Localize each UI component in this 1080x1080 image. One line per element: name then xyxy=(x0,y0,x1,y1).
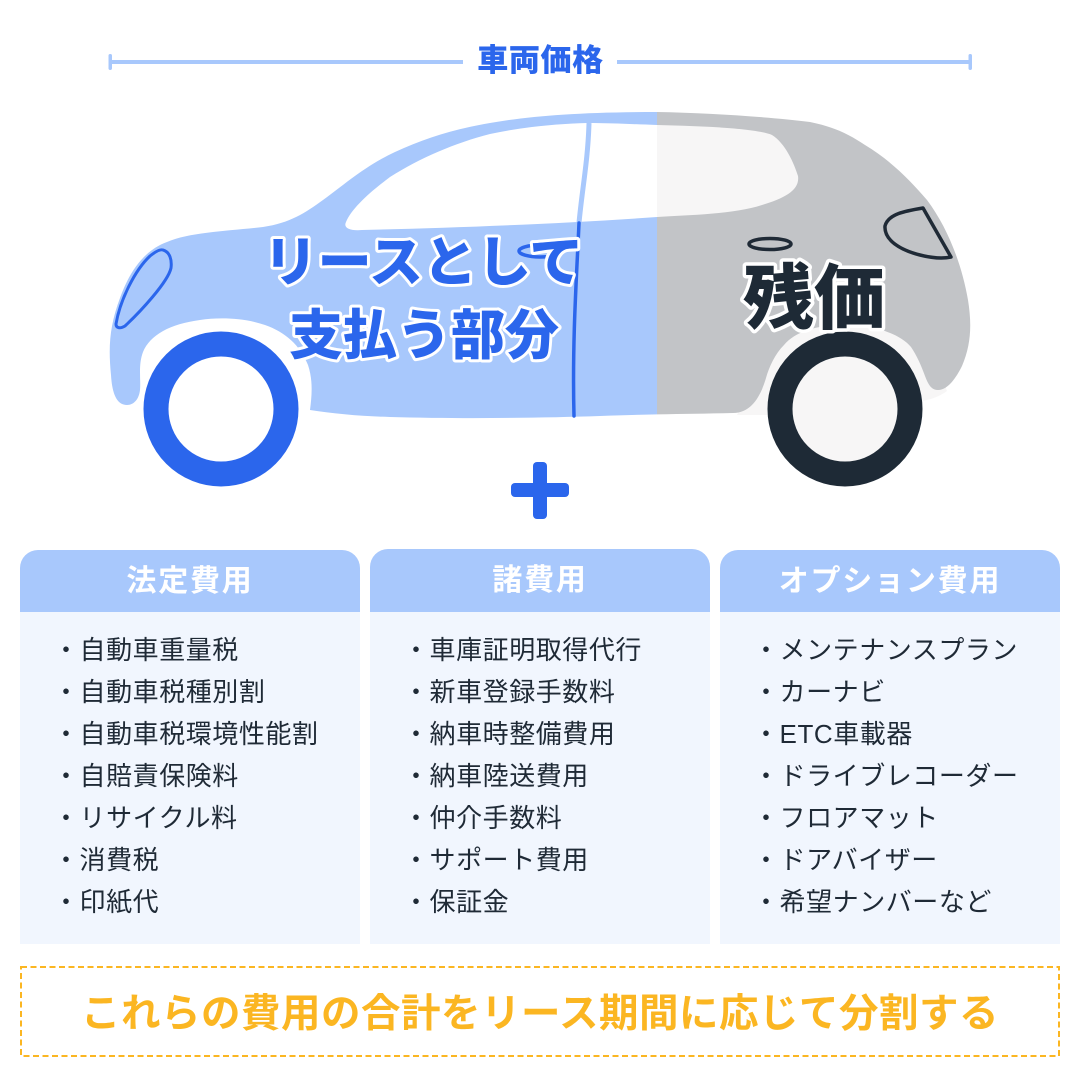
list: miscellaneous costs: ・納車時整備費用 xyxy=(403,719,615,749)
list: miscellaneous costs: ・仲介手数料 xyxy=(403,803,562,833)
callout: split total over lease period xyxy=(21,967,1059,1056)
list: statutory costs: ・自動車税環境性能割 xyxy=(53,719,319,749)
list: miscellaneous costs: ・納車陸送費用 xyxy=(403,761,589,791)
panel: statutory costs xyxy=(20,550,360,944)
car illustration xyxy=(110,112,970,474)
door line xyxy=(574,223,579,416)
list: option costs: ・希望ナンバーなど xyxy=(753,887,992,917)
callout: split total over lease period: これらの費用の合計をリース期間に応じて分割する xyxy=(81,992,999,1036)
icon: plus xyxy=(511,462,569,519)
label: lease portion xyxy=(264,233,583,366)
list: statutory costs: ・印紙代 xyxy=(53,887,159,917)
front wheel xyxy=(156,344,286,474)
header: vehicle price span: 車両価格 xyxy=(477,43,604,78)
window xyxy=(345,123,798,230)
list: miscellaneous costs: ・新車登録手数料 xyxy=(403,677,615,707)
label: lease portion: リースとして xyxy=(264,233,583,293)
front door handle xyxy=(519,245,561,257)
list: statutory costs xyxy=(53,635,319,917)
tail light xyxy=(885,208,951,258)
list: miscellaneous costs: ・サポート費用 xyxy=(403,845,589,875)
panel: miscellaneous costs xyxy=(370,549,710,944)
heading: statutory costs: 法定費用 xyxy=(126,565,254,598)
heading: miscellaneous costs: 諸費用 xyxy=(492,564,588,597)
list: statutory costs: ・自動車税種別割 xyxy=(53,677,265,707)
list: option costs xyxy=(753,635,1019,917)
list: statutory costs: ・自賠責保険料 xyxy=(53,761,239,791)
label: lease portion: 支払う部分 xyxy=(289,306,559,366)
heading: option costs: オプション費用 xyxy=(779,565,1001,598)
list: statutory costs: ・自動車重量税 xyxy=(53,635,239,665)
list: option costs: ・フロアマット xyxy=(753,803,939,833)
rear wheel xyxy=(780,344,910,474)
list: statutory costs: ・消費税 xyxy=(53,845,159,875)
list: option costs: ・メンテナンスプラン xyxy=(753,635,1018,665)
list: statutory costs: ・リサイクル料 xyxy=(53,803,238,833)
label: residual value: 残価 xyxy=(743,260,885,339)
list: option costs: ・カーナビ xyxy=(753,677,886,707)
panel: option costs xyxy=(720,550,1060,944)
headlight xyxy=(116,250,171,328)
list: miscellaneous costs: ・車庫証明取得代行 xyxy=(403,635,642,665)
list: miscellaneous costs xyxy=(403,635,642,917)
rear door handle xyxy=(749,238,791,250)
list: option costs: ・ドライブレコーダー xyxy=(753,761,1019,791)
list: option costs: ・ドアバイザー xyxy=(753,845,938,875)
header: vehicle price span xyxy=(108,43,972,78)
door pillar xyxy=(579,123,589,223)
list: option costs: ・ETC車載器 xyxy=(753,719,913,749)
list: miscellaneous costs: ・保証金 xyxy=(403,887,509,917)
